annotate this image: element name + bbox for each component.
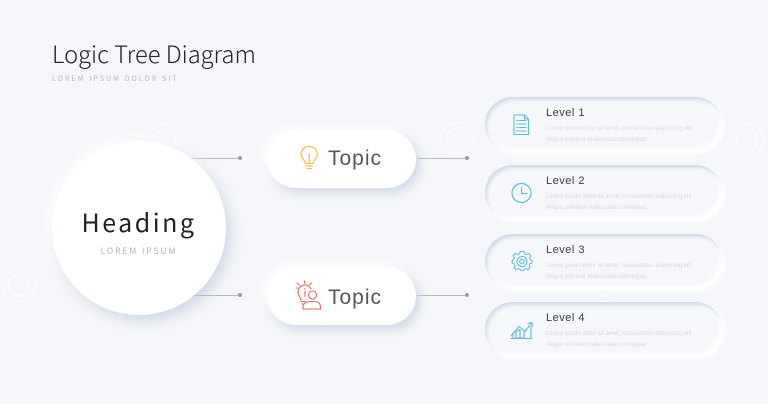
level 3 text: Aliqua pulvinar malesuada consequat.: [546, 274, 648, 280]
level 3 text: Lorem ipsum dolor sit amet, consectetur adipiscing elit.: [546, 263, 693, 269]
connector: heading to topic 2: [194, 293, 242, 297]
icon: light bulb: [300, 146, 318, 170]
icon: idea person: [296, 280, 322, 310]
level 1 title: Level 1: [546, 107, 585, 119]
panel: level 1: [485, 97, 723, 152]
panel: level 4: [485, 302, 723, 357]
topic 1 label: Topic: [328, 147, 382, 170]
title: Logic Tree Diagram: [52, 36, 256, 70]
level 3 text: [546, 262, 693, 280]
connector: heading to topic 1: [191, 156, 242, 160]
icon: clock: [511, 182, 532, 204]
level 4 text: Lorem ipsum dolor sit amet, consectetur adipiscing elit.: [546, 331, 693, 337]
icon: document: [513, 114, 530, 135]
connector: topic 1 to levels: [417, 156, 469, 160]
level 2 text: Aliqua pulvinar malesuada consequat.: [546, 205, 648, 211]
icon: gear: [512, 250, 532, 271]
heading text: Heading: [82, 204, 196, 240]
topic 2 label: Topic: [328, 286, 382, 309]
subtitle: LOREM IPSUM DOLOR SIT: [52, 74, 179, 84]
level 1 text: [546, 126, 693, 143]
heading subtext: LOREM IPSUM: [101, 245, 177, 257]
connector: topic 2 to levels: [417, 293, 469, 297]
panel: topic 2: [267, 267, 416, 325]
level 1 text: Aliqua pulvinar malesuada consequat.: [546, 137, 648, 143]
level 2 text: Lorem ipsum dolor sit amet, consectetur adipiscing elit.: [546, 194, 693, 200]
level 2 text: [546, 194, 693, 211]
panel: topic 1: [267, 130, 416, 188]
panel: level 3: [485, 234, 723, 289]
level 4 text: Aliqua pulvinar malesuada consequat.: [546, 342, 648, 348]
icon: chart: [510, 322, 533, 339]
heading circle: [52, 141, 226, 315]
level 3 title: Level 3: [546, 244, 585, 256]
level 1 text: Lorem ipsum dolor sit amet, consectetur adipiscing elit.: [546, 126, 693, 132]
panel: level 2: [485, 165, 723, 220]
level 4 text: [546, 330, 693, 348]
level 2 title: Level 2: [546, 175, 585, 187]
level 4 title: Level 4: [546, 312, 585, 324]
